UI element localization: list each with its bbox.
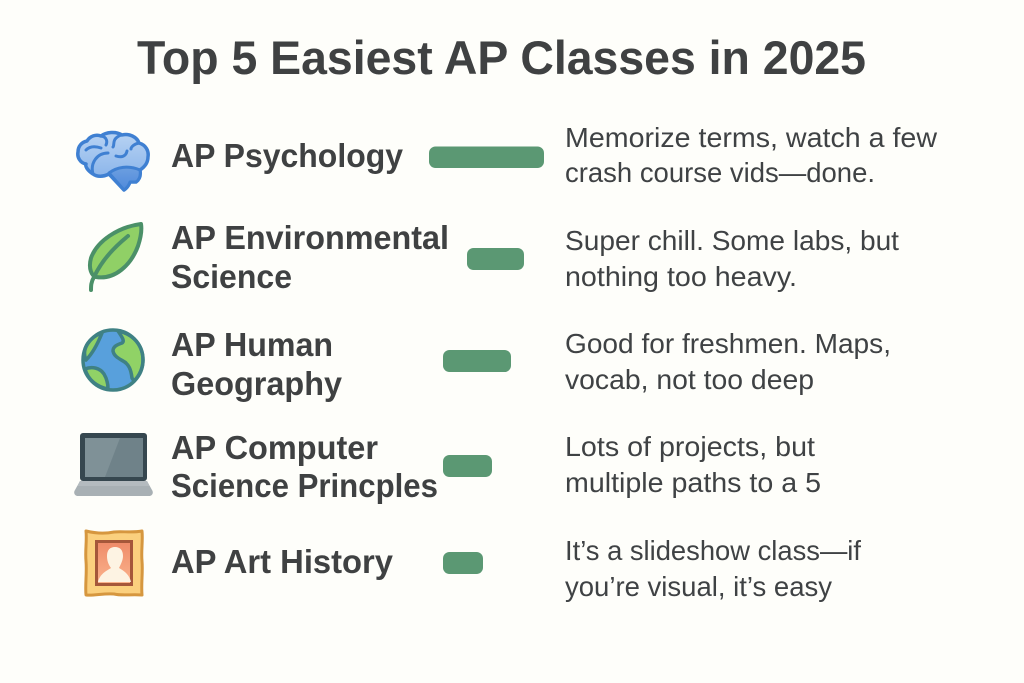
description: AP Psychology: crash course vids—done. [565,157,875,188]
label: AP Human Geography: AP Human [171,327,333,364]
description: AP Computer Science Principles: Lots of projects, but [565,431,815,462]
label: AP Environmental Science: AP Environmental [171,220,449,257]
description: AP Psychology [565,122,937,188]
description: AP Art History: you’re visual, it’s easy [565,571,832,602]
description: AP Environmental Science [565,225,899,292]
label: AP Environmental Science: Science [171,259,292,296]
description: AP Psychology: Memorize terms, watch a few [565,122,937,153]
label: AP Computer Science Principles [171,430,438,505]
bar: AP Environmental Science [467,248,524,270]
label: AP Human Geography: Geography [171,366,342,403]
description: AP Art History: It’s a slideshow class—if [565,535,861,566]
description: AP Art History [565,535,861,602]
label: AP Human Geography [171,327,342,403]
icon: laptop [74,433,153,496]
row: AP Art History [86,531,861,602]
label: AP Art History: AP Art History [171,544,393,581]
description: AP Human Geography [565,328,891,395]
label: AP Computer Science Principles: AP Computer [171,430,378,467]
title: Top 5 Easiest AP Classes in 2025 [137,31,866,84]
row: AP Environmental Science [90,220,899,296]
description: AP Environmental Science: Super chill. Some labs, but [565,225,899,256]
description: AP Human Geography: Good for freshmen. Maps, [565,328,891,359]
icon: globe [83,330,143,390]
description: AP Environmental Science: nothing too heavy. [565,261,797,292]
row: AP Human Geography [83,327,891,403]
description: AP Computer Science Principles: multiple paths to a 5 [565,467,821,498]
icon: leaf [90,224,141,290]
label: AP Computer Science Principles: Science Princples [171,468,438,505]
bar: AP Computer Science Principles [443,455,492,477]
label: AP Environmental Science [171,220,449,296]
row: AP Psychology [78,122,937,190]
bar: AP Psychology [429,146,544,168]
row: AP Computer Science Principles [74,430,821,505]
icon: brain [78,132,148,190]
description: AP Human Geography: vocab, not too deep [565,364,814,395]
bar: AP Art History [443,552,483,574]
description: AP Computer Science Principles [565,431,821,498]
label: AP Psychology: AP Psychology [171,138,403,175]
bar: AP Human Geography [443,350,511,372]
icon: framed portrait [86,531,142,595]
